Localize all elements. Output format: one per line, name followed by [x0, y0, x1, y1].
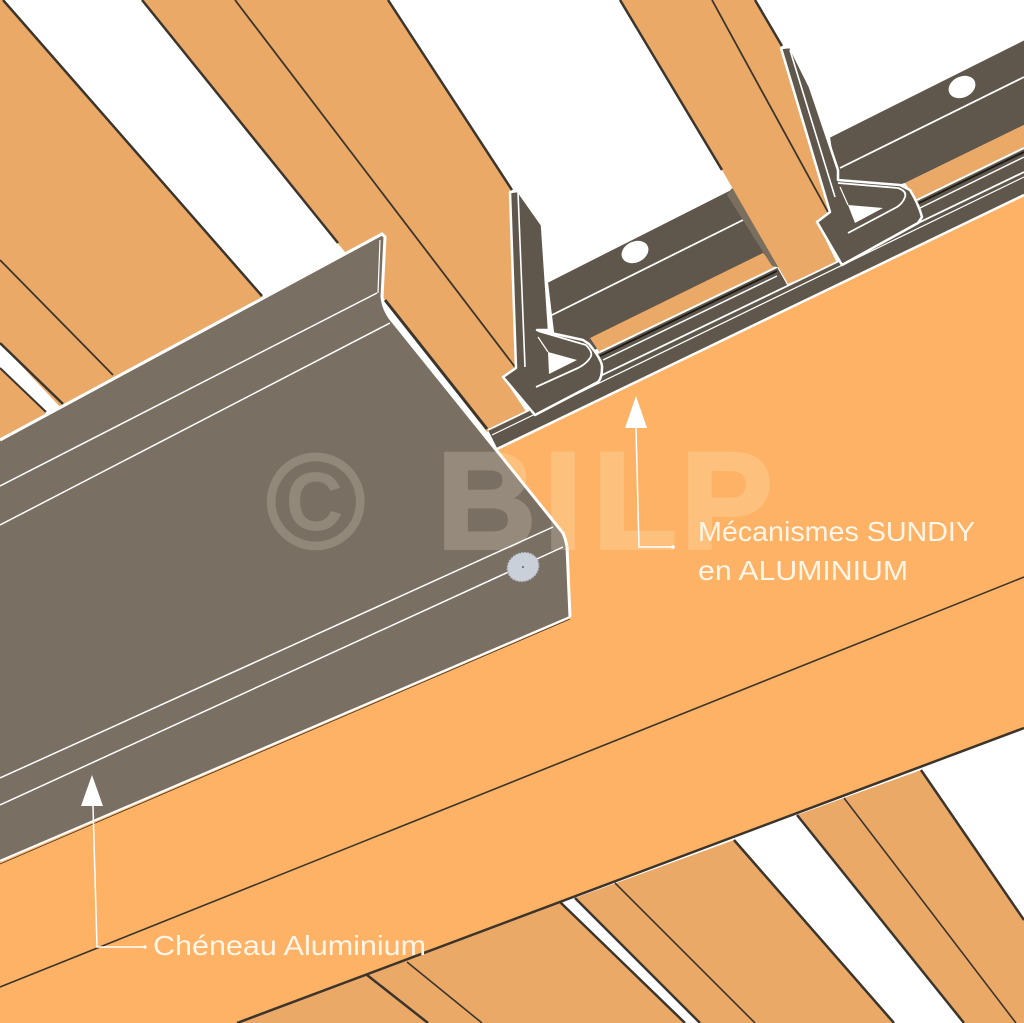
shadow on rafter side: [727, 188, 782, 268]
label: SUNDIY mechanisms: [698, 516, 975, 586]
lower rafters: [237, 728, 1024, 1023]
bracket: left SUNDIY mechanism: [503, 191, 602, 415]
orange strips below rear rail: [590, 125, 1024, 353]
rafter: central left: [142, 0, 527, 432]
rafter: central right: [620, 0, 837, 284]
rafter: lower left fragment: [0, 368, 46, 445]
label: SUNDIY mechanisms: en ALUMINIUM: [698, 555, 908, 586]
watermark: copyright BILP: [266, 425, 772, 578]
arrow: to aluminium gutter: [81, 775, 147, 949]
aluminium rail: rear strip with fixing holes: [548, 40, 1024, 352]
aluminium rail: upper part: [596, 148, 1024, 378]
watermark: copyright BILP: ©: [266, 426, 365, 577]
watermark: copyright BILP: BILP: [437, 425, 772, 578]
rafter: far left: [0, 0, 270, 410]
aluminium rail: lower part: [488, 172, 1024, 448]
gutter: aluminium profile: [0, 234, 570, 864]
screw on gutter: [503, 548, 543, 586]
bracket: right SUNDIY mechanism: [781, 47, 922, 265]
label: aluminium gutter: Chéneau Aluminium: [153, 930, 426, 961]
arrow: to SUNDIY mechanisms: [625, 396, 675, 549]
label: SUNDIY mechanisms: Mécanismes SUNDIY: [698, 516, 975, 547]
